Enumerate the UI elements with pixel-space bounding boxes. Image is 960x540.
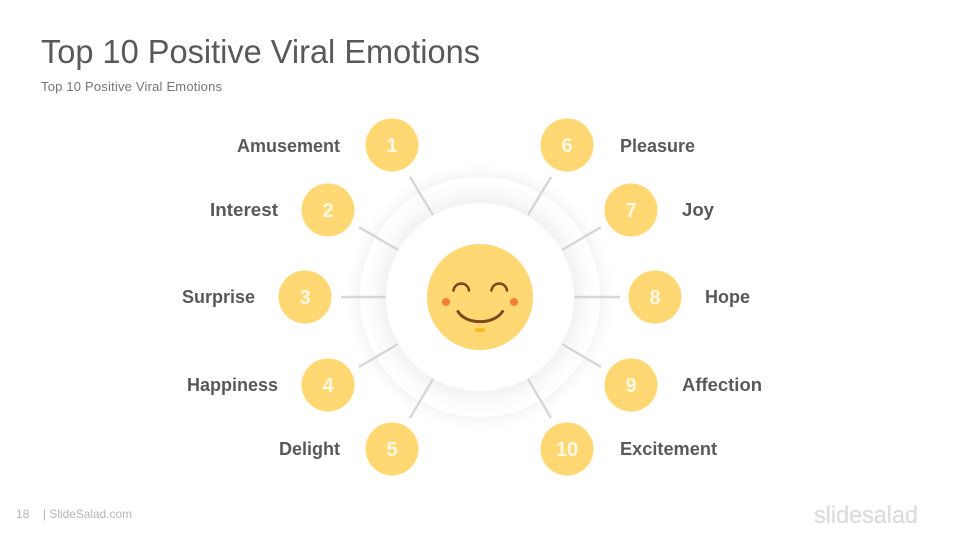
central concentric rings bbox=[345, 162, 615, 432]
item 8: Hope: 8 bbox=[649, 287, 661, 309]
item 5: Delight bbox=[279, 422, 418, 476]
item 3: Surprise: 3 bbox=[299, 287, 311, 309]
item 4: Happiness: 4 bbox=[322, 375, 334, 397]
item 10: Excitement: 10 bbox=[556, 439, 578, 461]
item 9: Affection: 9 bbox=[625, 375, 637, 397]
item 7: Joy bbox=[604, 184, 714, 236]
item 8: Hope: Hope bbox=[705, 287, 750, 307]
item 2: Interest: Interest bbox=[210, 200, 278, 220]
item 6: Pleasure: Pleasure bbox=[620, 136, 695, 156]
item 10: Excitement: Excitement bbox=[620, 439, 717, 459]
item 1: Amusement bbox=[237, 118, 418, 172]
logo wordmark: slidesalad bbox=[814, 502, 918, 529]
item 6: Pleasure: 6 bbox=[561, 135, 573, 157]
icon: smiling face bbox=[427, 244, 533, 350]
item 7: Joy: Joy bbox=[682, 200, 714, 220]
item 5: Delight: 5 bbox=[386, 439, 398, 461]
item 2: Interest bbox=[210, 184, 354, 236]
item 10: Excitement bbox=[540, 422, 717, 476]
footer source: | SlideSalad.com bbox=[43, 507, 132, 521]
item 1: Amusement: Amusement bbox=[237, 136, 340, 156]
item 3: Surprise bbox=[182, 270, 332, 324]
item 4: Happiness: Happiness bbox=[187, 375, 278, 395]
item 2: Interest: 2 bbox=[322, 200, 334, 222]
item 7: Joy: 7 bbox=[625, 200, 637, 222]
item 9: Affection: Affection bbox=[682, 375, 762, 395]
subtitle: Top 10 Positive Viral Emotions bbox=[41, 79, 222, 94]
item 8: Hope bbox=[628, 270, 750, 324]
item 5: Delight: Delight bbox=[279, 439, 340, 459]
item 3: Surprise: Surprise bbox=[182, 287, 255, 307]
title: Top 10 Positive Viral Emotions bbox=[41, 33, 480, 70]
footer page number: 18 bbox=[16, 507, 30, 521]
item 1: Amusement: 1 bbox=[386, 135, 398, 157]
connector lines bbox=[341, 177, 620, 418]
item 6: Pleasure bbox=[540, 118, 695, 172]
item 4: Happiness bbox=[187, 358, 354, 412]
item 9: Affection bbox=[604, 358, 762, 412]
